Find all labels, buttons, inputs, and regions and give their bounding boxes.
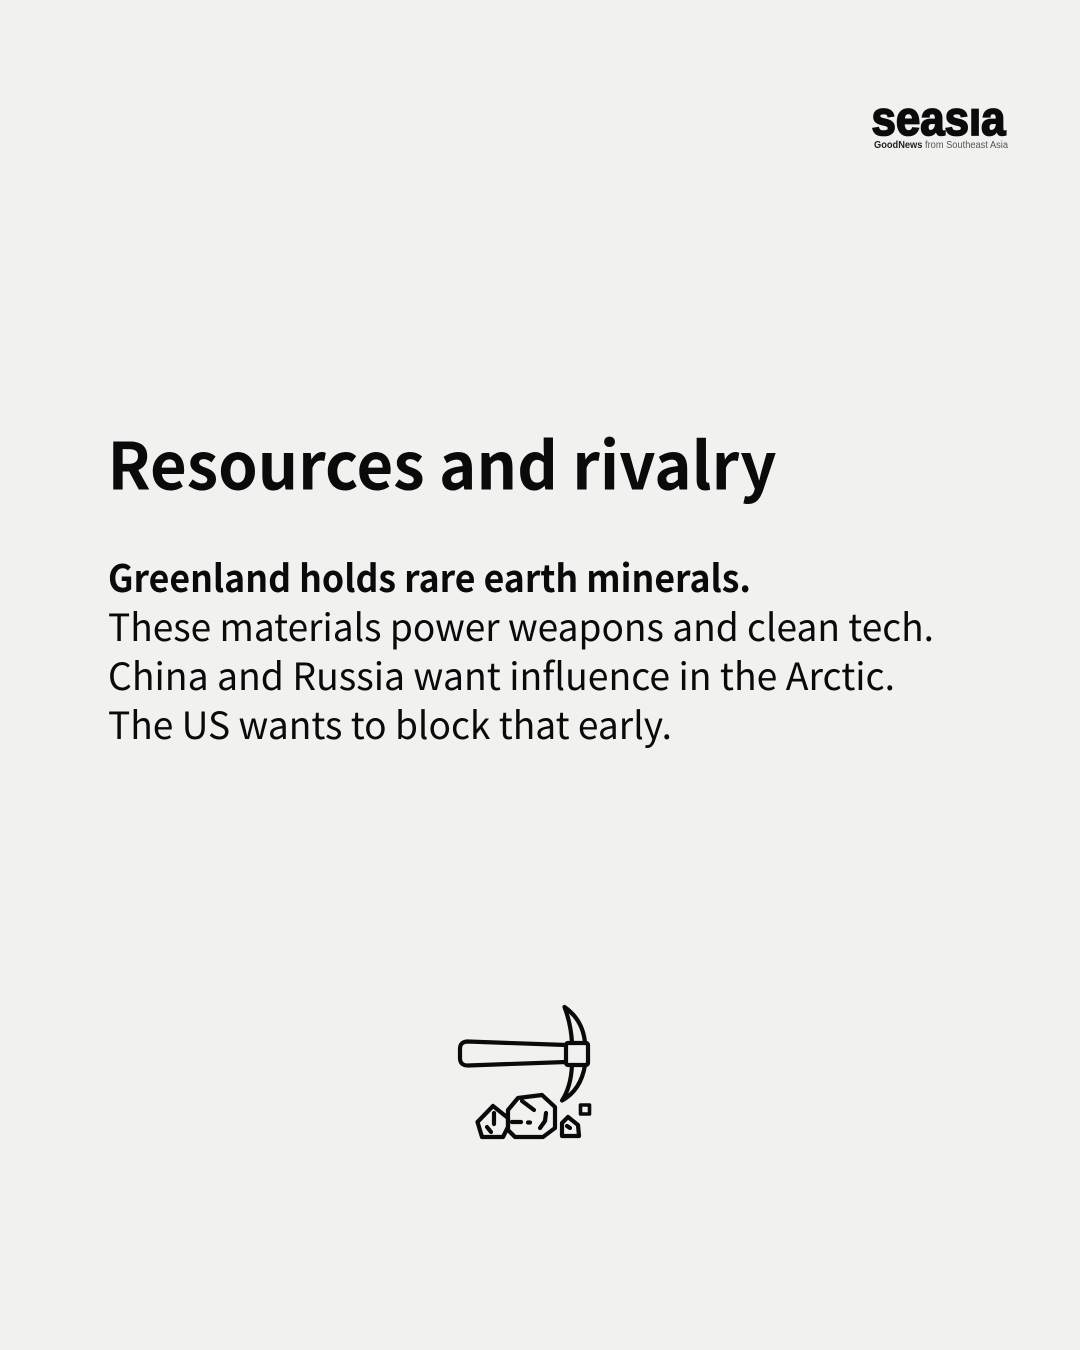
title: Resources and rivalry (108, 414, 776, 508)
rocks (478, 1095, 590, 1137)
logo: seasia (866, 88, 1012, 151)
body line 4: The US wants to block that early. (108, 695, 672, 750)
logo wordmark: seasia (872, 93, 1006, 146)
logo tagline: GoodNews from Southeast Asia (874, 140, 1008, 151)
body text (108, 548, 934, 750)
body line 2: These materials power weapons and clean tech. (108, 597, 934, 652)
pickaxe (460, 1007, 588, 1100)
icon: pickaxe and rocks (460, 1007, 590, 1137)
body line 3: China and Russia want influence in the Arctic. (108, 646, 895, 701)
body line: bold lead: Greenland holds rare earth minerals. (108, 548, 751, 603)
